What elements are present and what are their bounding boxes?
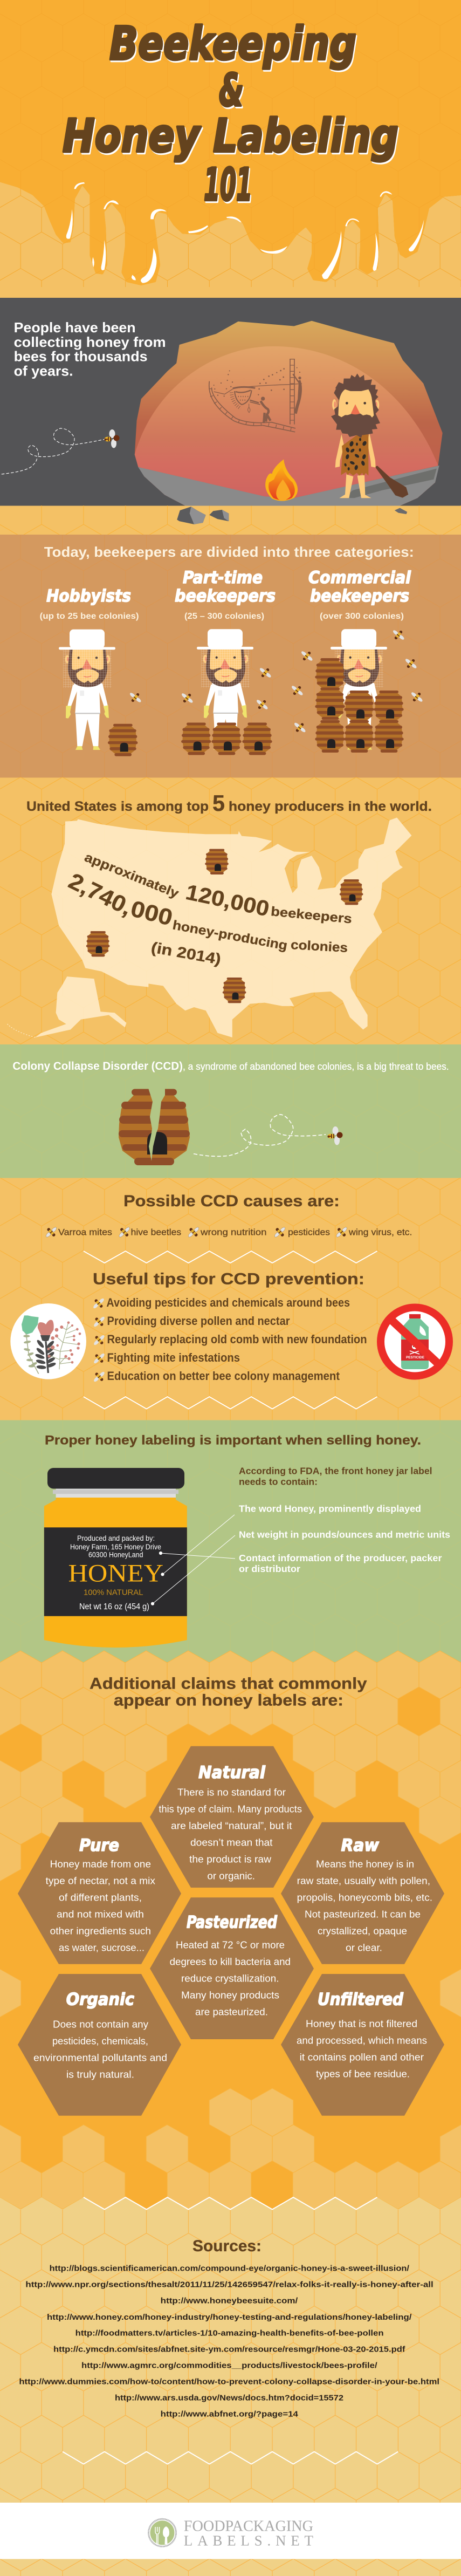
heading: , a syndrome of abandoned bee colonies, is a big threat to bees. bbox=[183, 1061, 449, 1072]
label requirements: Net weight in pounds/ounces and metric units bbox=[239, 1529, 450, 1540]
bee flight path bbox=[194, 1115, 326, 1156]
heading bbox=[90, 1675, 367, 1710]
bee flight path bbox=[2, 428, 105, 474]
FDA intro text: needs to contain: bbox=[239, 1477, 318, 1487]
jar label text: Net wt 16 oz (454 g) bbox=[79, 1602, 149, 1611]
hexagon: Pure: Pure bbox=[79, 1836, 119, 1855]
panel: cave history bbox=[0, 298, 461, 535]
hexagon: Pasteurized: Pasteurized bbox=[187, 1912, 278, 1932]
logo wordmark: FOODPACKAGING bbox=[184, 2518, 313, 2535]
hexagon: Organic: Organic bbox=[66, 1990, 135, 2010]
icon: no pesticides bbox=[381, 1308, 449, 1376]
hexagon: Pure: Honey made from one bbox=[50, 1859, 151, 1870]
honeycomb background bbox=[0, 1651, 461, 2209]
map statistics: honey-producing bbox=[171, 918, 288, 953]
hexagon: Pure bbox=[18, 1822, 181, 1964]
hexagon: Pasteurized: reduce crystallization. bbox=[181, 1973, 279, 1984]
prevention list: Fighting mite infestations bbox=[107, 1351, 240, 1364]
source list: http://blogs.scientificamerican.com/compound-eye/organic-honey-is-a-sweet-illusion/ bbox=[50, 2264, 410, 2273]
title: & bbox=[219, 64, 244, 117]
logo wordmark: LABELS.NET bbox=[184, 2532, 314, 2548]
category titles: Hobbyists bbox=[46, 586, 131, 606]
label requirements bbox=[239, 1504, 450, 1574]
hexagon: Pure: and not mixed with bbox=[57, 1909, 144, 1920]
map statistics: 120,000 bbox=[184, 880, 271, 921]
prevention list: Providing diverse pollen and nectar bbox=[107, 1314, 290, 1328]
icon: broken hive bbox=[119, 1088, 190, 1165]
map hives bbox=[86, 849, 363, 1003]
hexagon: Raw: propolis, honeycomb bits, etc. bbox=[297, 1892, 432, 1903]
cause list: Varroa mites bbox=[58, 1227, 112, 1238]
FDA intro text bbox=[239, 1466, 432, 1487]
map: United States bbox=[8, 818, 411, 1037]
hexagon: Pasteurized bbox=[150, 1897, 314, 2039]
cause list: pesticides bbox=[288, 1227, 330, 1238]
hexagon: Unfiltered: types of bee residue. bbox=[316, 2069, 410, 2080]
source list: http://c.ymcdn.com/sites/abfnet.site-ym.com/resource/resmgr/Hone-03-20-2015.pdf bbox=[53, 2345, 406, 2354]
map statistics: 000 bbox=[128, 896, 175, 931]
heading bbox=[26, 790, 432, 816]
text: intro: bees for thousands bbox=[14, 349, 148, 365]
source list: http://www.dummies.com/how-to/content/how-to-prevent-colony-collapse-disorder-in-your-be.html bbox=[19, 2377, 439, 2387]
hexagon: Natural: are labeled “natural”, but it bbox=[171, 1821, 292, 1832]
panel: US honey production bbox=[0, 777, 461, 1044]
icon: fire bbox=[265, 459, 298, 501]
colony counts bbox=[40, 612, 404, 621]
heading: Additional claims that commonly bbox=[90, 1675, 367, 1693]
category titles: beekeepers bbox=[175, 586, 276, 606]
commercial figure bbox=[291, 629, 423, 753]
heading: Colony Collapse Disorder (CCD) bbox=[12, 1060, 183, 1072]
hexagon: Pure: as water, sucrose... bbox=[59, 1943, 145, 1953]
caveman bbox=[331, 373, 408, 498]
jar label text: HONEY bbox=[68, 1560, 163, 1588]
panel: causes and prevention bbox=[0, 1178, 461, 1421]
prevention list bbox=[93, 1296, 367, 1383]
hobbyist figure bbox=[59, 630, 142, 756]
hexagon: Natural: doesn’t mean that bbox=[190, 1837, 273, 1848]
cause list bbox=[45, 1226, 412, 1238]
hexagon: Raw: or clear. bbox=[346, 1943, 382, 1953]
title: Honey Labeling bbox=[63, 110, 398, 163]
hexagon: Raw: crystallized, opaque bbox=[318, 1926, 407, 1937]
hexagon: Unfiltered: Unfiltered bbox=[318, 1990, 404, 2010]
map statistics: beekeepers bbox=[270, 904, 353, 926]
source list: http://www.ars.usda.gov/News/docs.htm?docid=15572 bbox=[115, 2394, 343, 2403]
hexagon: Raw: Means the honey is in bbox=[316, 1859, 414, 1870]
hexagon: Unfiltered: it contains pollen and other bbox=[300, 2052, 424, 2063]
colony counts: (25 – 300 colonies) bbox=[184, 612, 264, 621]
hexagon: Organic bbox=[18, 1974, 181, 2116]
jar label text: 100% NATURAL bbox=[84, 1588, 143, 1597]
hexagon: Natural: this type of claim. Many products bbox=[159, 1803, 302, 1814]
source list: http://www.honey.com/honey-industry/honey-testing-and-regulations/honey-labeling/ bbox=[47, 2313, 412, 2322]
hexagon: Pure: of different plants, bbox=[59, 1892, 142, 1903]
hexagon: Raw: Raw bbox=[341, 1836, 379, 1855]
source list: http://www.npr.org/sections/thesalt/2011/11/25/142659547/relax-folks-it-really-is-honey-after-all bbox=[25, 2280, 434, 2290]
jar label text bbox=[68, 1534, 163, 1611]
heading: causes: Possible CCD causes are: bbox=[123, 1192, 340, 1210]
hexagon: Pure: other ingredients such bbox=[50, 1926, 151, 1937]
hexagon: Organic: environmental pollutants and bbox=[33, 2053, 167, 2063]
title: 101 bbox=[204, 159, 252, 211]
panel: honey labeling bbox=[0, 1420, 461, 1663]
map statistics bbox=[65, 850, 353, 968]
panel: footer logo bbox=[0, 2503, 461, 2559]
rocky ground band bbox=[0, 505, 461, 535]
hexagon: Raw: Not pasteurized. It can be bbox=[305, 1909, 421, 1920]
cause list: wrong nutrition bbox=[200, 1227, 266, 1238]
hexagon: Natural: the product is raw bbox=[189, 1854, 272, 1865]
heading: United States is among top bbox=[26, 799, 209, 814]
category titles: Commercial bbox=[308, 568, 411, 587]
FDA intro text: According to FDA, the front honey jar label bbox=[239, 1466, 432, 1477]
honey drip bbox=[0, 0, 461, 285]
text: intro: People have been bbox=[14, 319, 136, 336]
source list: http://www.abfnet.org/?page=14 bbox=[161, 2409, 299, 2418]
label requirements: or distributor bbox=[239, 1563, 300, 1574]
hexagon: Pasteurized: are pasteurized. bbox=[195, 2007, 268, 2018]
panel: title header bbox=[0, 0, 461, 298]
panel: sources bbox=[0, 2197, 461, 2503]
panel: beekeeper categories bbox=[0, 535, 461, 778]
map statistics: 2,740, bbox=[65, 868, 136, 920]
label requirements: Contact information of the producer, packer bbox=[239, 1553, 442, 1563]
label requirements: The word Honey, prominently displayed bbox=[239, 1504, 421, 1514]
hexagon: Pasteurized: Heated at 72 °C or more bbox=[176, 1940, 285, 1951]
heading: Proper honey labeling is important when selling honey. bbox=[45, 1433, 421, 1448]
panel: honey label claims bbox=[0, 1651, 461, 2212]
map statistics: approximately bbox=[82, 850, 181, 901]
hexagon: Natural bbox=[150, 1746, 314, 1888]
hexagon: Natural: Natural bbox=[198, 1763, 265, 1782]
hexagon: Unfiltered: and processed, which means bbox=[297, 2035, 427, 2046]
heading: appear on honey labels are: bbox=[114, 1692, 343, 1710]
cause list: hive beetles bbox=[131, 1227, 181, 1238]
panel: colony collapse disorder bbox=[0, 1044, 461, 1178]
hexagon: Organic: pesticides, chemicals, bbox=[52, 2036, 148, 2047]
icon: flying bee bbox=[328, 1126, 343, 1145]
callout lines bbox=[151, 1515, 235, 1605]
hexagon: Unfiltered bbox=[281, 1974, 444, 2116]
jar label text: 60300 HoneyLand bbox=[88, 1550, 143, 1559]
text: intro: collecting honey from bbox=[14, 334, 166, 350]
text: intro bbox=[14, 319, 166, 379]
hexagon: Raw: raw state, usually with pollen, bbox=[297, 1876, 430, 1887]
map statistics: (in 2014) bbox=[150, 939, 222, 968]
honey jar bbox=[44, 1468, 187, 1648]
source list: http://www.honeybeesuite.com/ bbox=[161, 2297, 298, 2306]
heading: honey producers in the world. bbox=[229, 799, 432, 814]
title: Beekeeping bbox=[109, 17, 356, 71]
source list bbox=[19, 2264, 439, 2418]
hexagon: Organic: is truly natural. bbox=[66, 2069, 134, 2080]
jar label text: Produced and packed by: bbox=[77, 1534, 155, 1542]
title bbox=[63, 17, 398, 211]
part-time figure bbox=[181, 629, 272, 755]
footer strip bbox=[0, 2559, 461, 2576]
hexagon: Organic: Does not contain any bbox=[53, 2019, 148, 2030]
prevention list: Education on better bee colony management bbox=[107, 1369, 340, 1383]
hexagon: Natural: There is no standard for bbox=[177, 1787, 286, 1798]
heading: prevention tips: Useful tips for CCD prevention: bbox=[93, 1270, 364, 1288]
icon: flowers bbox=[10, 1303, 86, 1379]
source list: http://foodmatters.tv/articles-1/10-amazing-health-benefits-of-bee-pollen bbox=[75, 2329, 384, 2338]
hexagon: Pasteurized: degrees to kill bacteria and bbox=[170, 1957, 291, 1967]
map statistics: colonies bbox=[290, 938, 348, 955]
category titles: beekeepers bbox=[310, 586, 409, 606]
hexagon: Raw bbox=[281, 1822, 444, 1964]
hexagon: Unfiltered: Honey that is not filtered bbox=[306, 2019, 417, 2030]
cave painting bbox=[209, 359, 302, 432]
cave illustration bbox=[135, 321, 443, 505]
rocks bbox=[177, 507, 407, 524]
cause list: wing virus, etc. bbox=[348, 1227, 412, 1238]
heading: Today, beekeepers are divided into three categories: bbox=[44, 544, 414, 560]
prevention list: Avoiding pesticides and chemicals around bees bbox=[106, 1296, 350, 1309]
colony counts: (up to 25 bee colonies) bbox=[40, 612, 139, 621]
heading: 5 bbox=[212, 790, 225, 816]
jar label text: Honey Farm, 165 Honey Drive bbox=[70, 1542, 161, 1551]
icon: logo badge bbox=[149, 2519, 176, 2546]
category titles bbox=[46, 568, 411, 606]
hexagon: Pure: type of nectar, not a mix bbox=[45, 1876, 155, 1887]
heading: Sources: bbox=[192, 2237, 262, 2255]
hexagon: Pasteurized: Many honey products bbox=[181, 1990, 279, 2001]
source list: http://www.agmrc.org/commodities__products/livestock/bees-profile/ bbox=[81, 2361, 378, 2370]
logo wordmark bbox=[184, 2518, 314, 2548]
icon: flying bee bbox=[105, 429, 120, 448]
prevention list: Regularly replacing old comb with new foundation bbox=[107, 1333, 367, 1346]
icon: no pesticides: PESTICIDE bbox=[406, 1356, 425, 1359]
honey highlights bbox=[66, 182, 424, 283]
text: intro: of years. bbox=[14, 363, 73, 379]
category titles: Part-time bbox=[183, 568, 263, 587]
colony counts: (over 300 colonies) bbox=[320, 612, 404, 621]
heading bbox=[12, 1060, 449, 1072]
hexagon: Natural: or organic. bbox=[207, 1870, 255, 1881]
